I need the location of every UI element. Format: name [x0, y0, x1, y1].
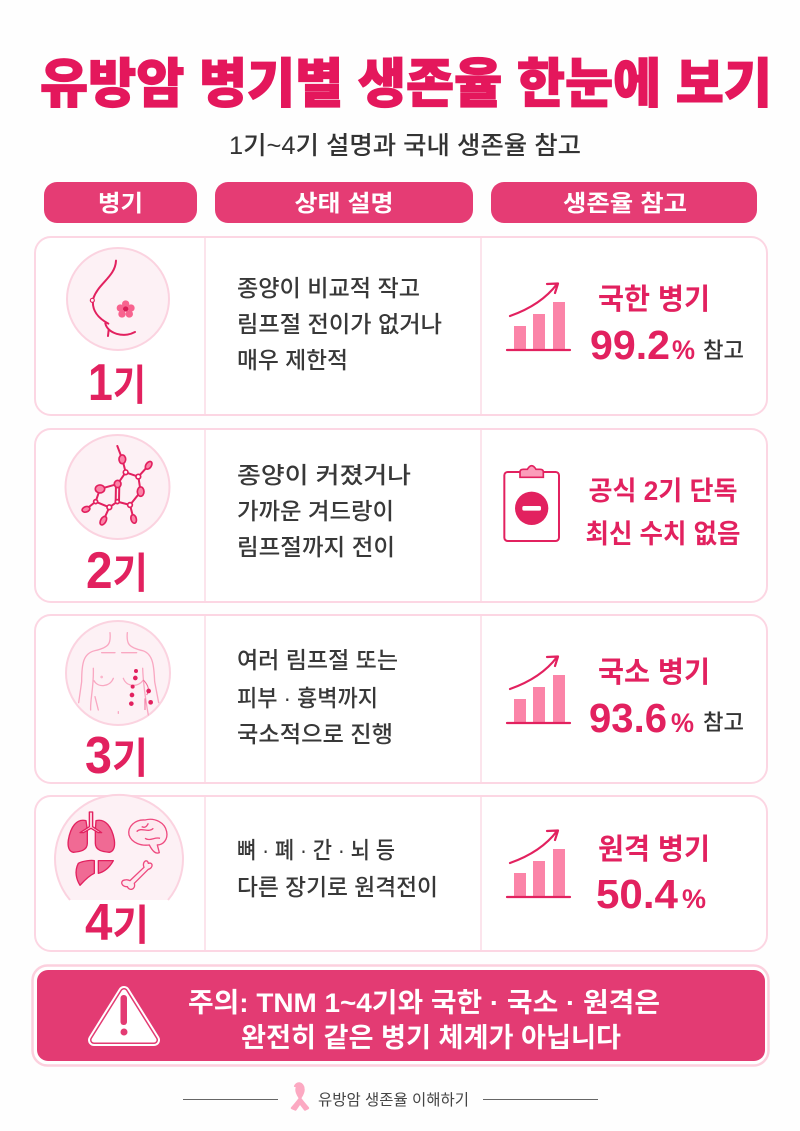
description 3: 피부 · 흉벽까지	[237, 685, 378, 711]
panel: stage 2	[35, 429, 767, 602]
title: 유방암 병기별 생존율 한눈에 보기	[40, 42, 772, 118]
icon: breast with flower	[67, 248, 169, 350]
panel: stage 1	[35, 237, 767, 415]
survival value 1: 참고	[703, 338, 744, 363]
survival value 4: 50.4	[596, 871, 678, 917]
icon: clipboard with minus sign	[504, 466, 559, 541]
no data note: 최신 수치 없음	[586, 519, 740, 549]
description 1: 림프절 전이가 없거나	[237, 311, 442, 337]
header: survival: 생존율 참고	[563, 190, 687, 216]
warning text: 완전히 같은 병기 체계가 아닙니다	[241, 1023, 621, 1053]
survival value 3: 참고	[703, 710, 744, 735]
stage label 1: 1기	[88, 354, 146, 412]
description 2: 종양이 커졌거나	[237, 462, 411, 488]
column headers	[44, 182, 757, 223]
description 1	[237, 275, 442, 373]
icon: torso with lymph spread	[66, 621, 170, 725]
no data note: 공식 2기 단독	[588, 476, 738, 506]
description 3: 국소적으로 진행	[237, 721, 393, 747]
stage label 3: 3기	[85, 727, 148, 785]
icon: rising bar chart	[507, 656, 570, 723]
description 3: 여러 림프절 또는	[237, 647, 398, 673]
header: survival	[491, 182, 757, 223]
survival label 3: 국소 병기	[598, 656, 710, 689]
header: description	[215, 182, 473, 223]
subtitle: 1기~4기 설명과 국내 생존율 참고	[229, 132, 581, 160]
stage label 2: 2기	[86, 542, 148, 600]
warning text	[188, 988, 660, 1053]
icon: pink ribbon	[292, 1083, 308, 1110]
bone	[122, 861, 152, 889]
description 4: 다른 장기로 원격전이	[237, 874, 438, 900]
header: stage: 병기	[98, 190, 143, 216]
survival value 1: 99.2	[590, 322, 670, 368]
survival value 4: %	[682, 884, 706, 914]
survival label 1: 국한 병기	[598, 283, 710, 316]
header: description: 상태 설명	[294, 190, 394, 216]
survival value 3: %	[671, 708, 694, 738]
survival value 3	[589, 695, 744, 741]
panel: stage 3	[35, 615, 767, 785]
brain	[129, 819, 167, 853]
description 2: 림프절까지 전이	[237, 534, 395, 560]
description 3	[237, 647, 398, 747]
lungs	[68, 812, 115, 852]
icon: lymph node network	[66, 435, 170, 539]
description 4: 뼈 · 폐 · 간 · 뇌 등	[237, 837, 395, 863]
icon: rising bar chart	[507, 284, 570, 350]
description 2	[237, 462, 411, 560]
liver	[76, 860, 113, 885]
no data note	[586, 476, 740, 549]
footer	[183, 1083, 598, 1110]
survival label 4: 원격 병기	[598, 833, 710, 866]
stage label 4: 4기	[85, 894, 149, 952]
warning text: 주의: TNM 1~4기와 국한 · 국소 · 원격은	[188, 988, 660, 1018]
warning banner	[32, 966, 768, 1066]
icon: lungs, brain, liver, bone	[55, 795, 183, 900]
survival value 1: %	[672, 335, 695, 365]
header: stage	[44, 182, 197, 223]
survival value 3: 93.6	[589, 695, 667, 741]
footer text: 유방암 생존율 이해하기	[318, 1091, 469, 1109]
icon: warning triangle	[94, 992, 154, 1040]
description 1: 종양이 비교적 작고	[237, 275, 420, 301]
description 1: 매우 제한적	[237, 347, 348, 373]
description 2: 가까운 겨드랑이	[237, 498, 394, 524]
description 4	[237, 837, 438, 900]
survival value 1	[590, 322, 744, 368]
panel: stage 4	[35, 795, 767, 952]
icon: rising bar chart	[507, 830, 570, 897]
